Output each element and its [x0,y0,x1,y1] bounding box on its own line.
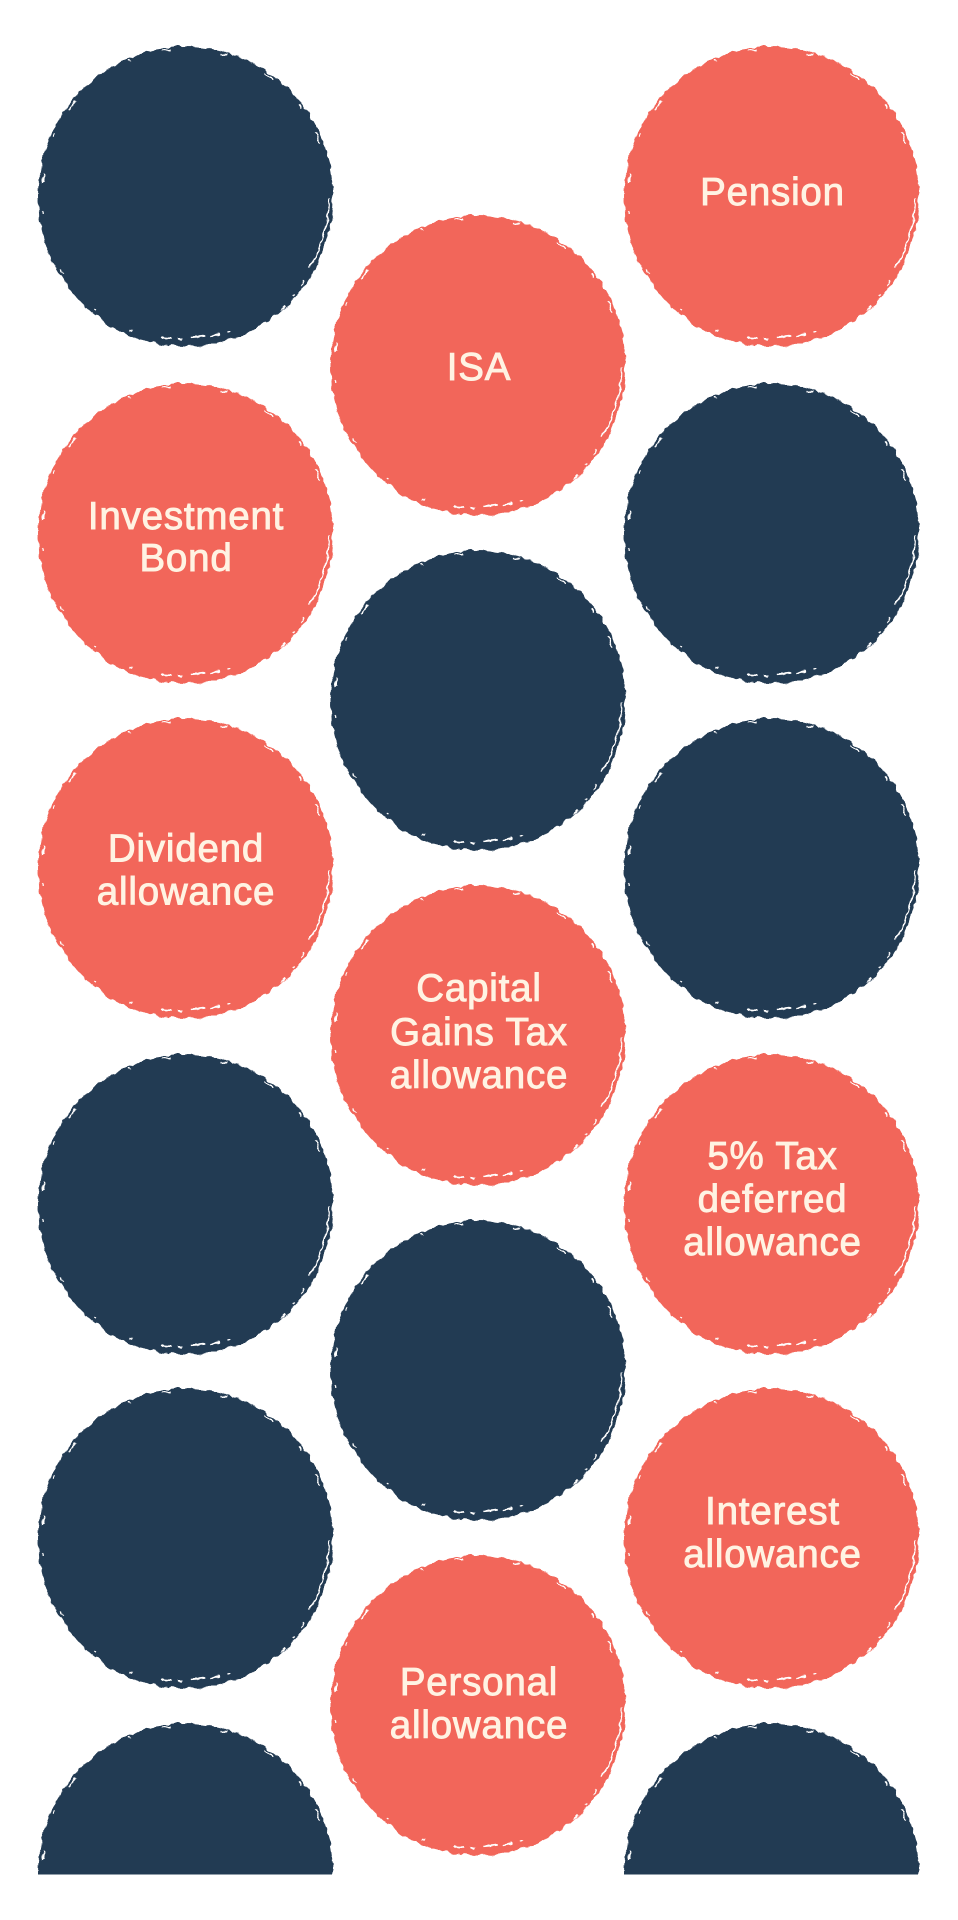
circle: Personal allowance [330,1556,626,1856]
circle: Investment Bond: Bond [139,537,233,580]
circle: navy row 5 left [38,1388,333,1688]
circle: navy row 3 right [624,718,919,1018]
circle: ISA [330,216,626,516]
circle: Dividend allowance: allowance [97,870,275,914]
circle: 5% Tax deferred allowance [624,1054,919,1354]
circle: Pension: Pension [700,171,845,214]
circle: Capital Gains Tax allowance: allowance [390,1054,568,1097]
circle: navy row 2 centre [330,550,626,850]
circle: 5% Tax deferred allowance: allowance [683,1221,862,1264]
circle: Interest allowance: Interest [705,1490,840,1533]
circle: navy row 2 right [624,384,919,684]
circle: 5% Tax deferred allowance: deferred [698,1178,847,1221]
circle: navy bottom left, cropped [38,1724,333,1882]
circle: navy row 4 centre [330,1220,626,1520]
circle: navy row 4 left [38,1054,333,1354]
circle: Capital Gains Tax allowance: Capital [416,967,542,1010]
circle: Interest allowance [624,1388,919,1688]
circle: Personal allowance: allowance [390,1704,568,1747]
circle: Dividend allowance: Dividend [108,828,264,870]
circle: Personal allowance: Personal [400,1661,558,1704]
circle: Investment Bond: Investment [88,495,284,538]
circle: navy bottom right, cropped [624,1724,919,1882]
circle: Pension [624,46,919,346]
circle: Interest allowance: allowance [683,1533,862,1576]
circle: 5% Tax deferred allowance: 5% Tax [707,1135,838,1178]
circle: Dividend allowance [38,718,333,1018]
circle: navy row 1 left [38,46,333,346]
circle: Capital Gains Tax allowance: Gains Tax [390,1011,568,1054]
circle: Investment Bond [38,384,333,684]
circle: ISA: ISA [447,346,511,389]
circle: Capital Gains Tax allowance [330,886,626,1186]
